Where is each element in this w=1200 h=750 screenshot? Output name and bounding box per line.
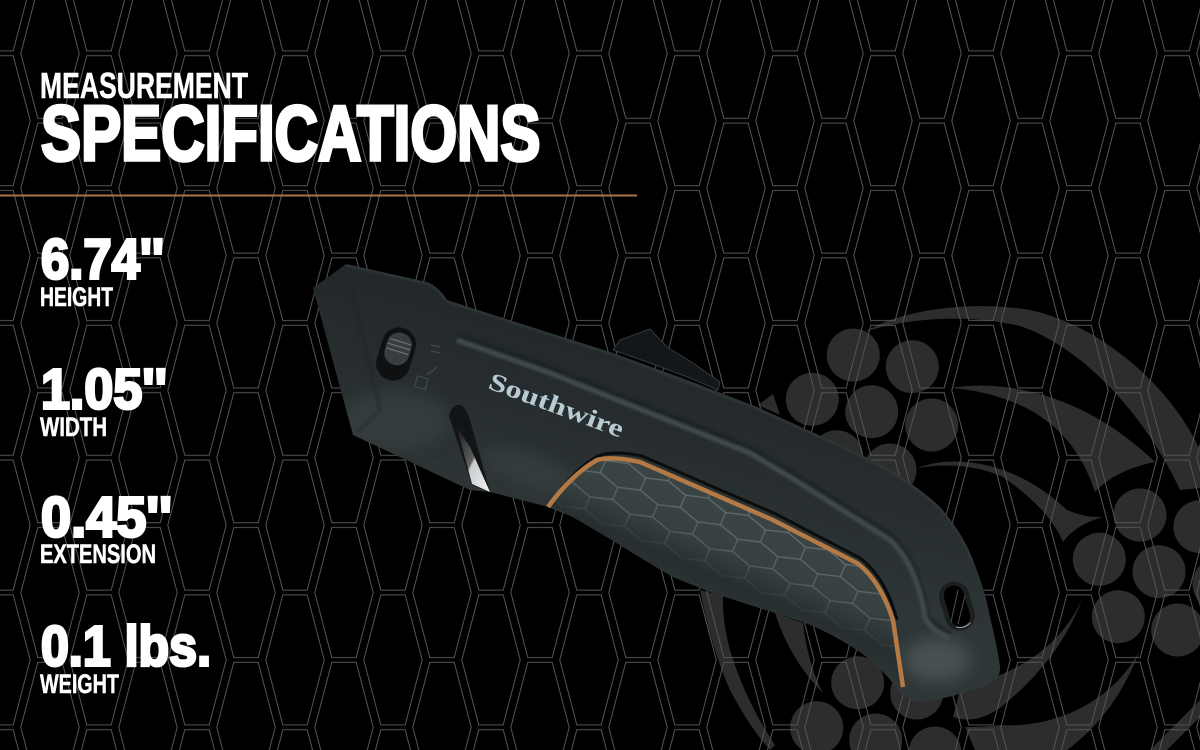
utility knife xyxy=(313,264,1000,702)
spec: height: HEIGHT xyxy=(40,282,113,312)
lanyard hole xyxy=(935,578,979,634)
spec: weight: WEIGHT xyxy=(40,669,119,699)
spec: width: WIDTH xyxy=(40,412,107,442)
knife body xyxy=(313,264,1000,702)
spec: weight xyxy=(40,614,211,699)
copper accent band xyxy=(548,458,903,687)
spec: extension: EXTENSION xyxy=(40,539,156,569)
spec: extension: 0.45'' xyxy=(41,486,172,550)
background logo swirl xyxy=(700,306,1200,750)
lock button xyxy=(372,323,420,385)
rubber grip xyxy=(556,460,898,678)
divider xyxy=(0,194,637,196)
spec: height: 6.74'' xyxy=(41,228,164,292)
grip shadow line xyxy=(553,453,897,620)
spec: width: 1.05'' xyxy=(41,358,167,422)
title xyxy=(40,65,540,177)
slider thumb xyxy=(613,329,720,390)
spec: weight: 0.1 lbs. xyxy=(41,614,211,678)
title line: specifications: SPECIFICATIONS xyxy=(41,89,540,177)
title line: measurement: MEASUREMENT xyxy=(40,65,248,106)
lock icon xyxy=(414,345,440,389)
spec: height xyxy=(40,228,164,312)
brand name: Southwire xyxy=(485,368,627,443)
blade slot and blade xyxy=(449,405,490,492)
